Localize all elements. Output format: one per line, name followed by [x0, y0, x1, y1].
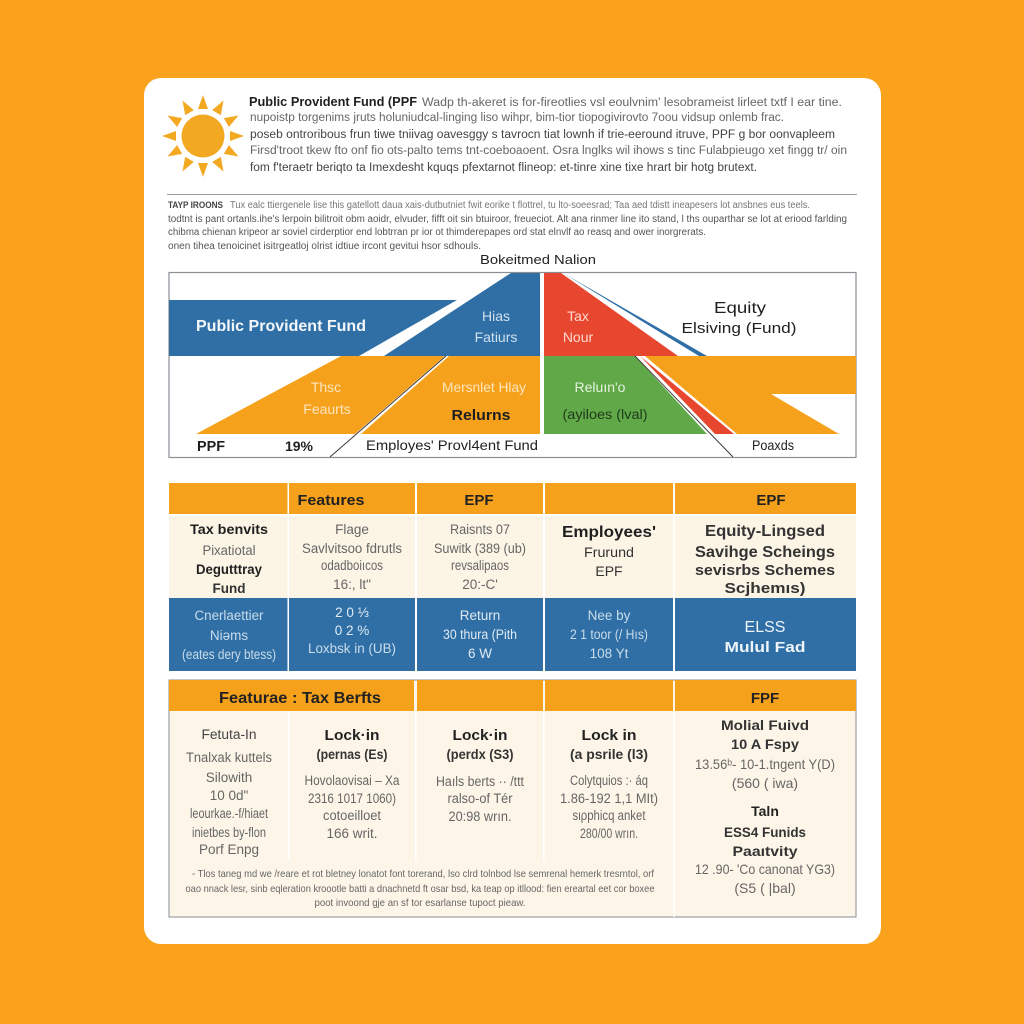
- table 1 cream row: [169, 516, 856, 598]
- diagram labels: Relurns: [452, 407, 510, 424]
- table 2 column 5 text: ESS4 Funids: [724, 824, 806, 840]
- table 2 column 1 text: leourkae.-f/hiaet: [190, 806, 268, 821]
- table 2 header row: [169, 680, 856, 711]
- table 2: tax benefits: [169, 680, 856, 917]
- descriptive text block: chibma chienan kripeor ar soviel cirderptior end lobtrran pr ior ot thimderepapes ord stat elnvlf ao reasq and ower inorgrerats.: [168, 227, 706, 238]
- table 1 cream row text: Flage: [335, 522, 369, 537]
- segment: red sliver: [640, 356, 734, 434]
- intro text block: Wadp th-akeret is for-fireotlies vsl eoulvnim' lesobrameist lirleet txtf I ear tine.: [422, 97, 842, 109]
- table 1 blue row text: ELSS: [745, 619, 785, 636]
- table 2 column 4 text: Colytquios :· áq: [570, 773, 648, 788]
- segment: blue band: [169, 300, 457, 356]
- diagram labels: Tax: [567, 308, 589, 324]
- table 2 column 1 text: 10 0d": [210, 788, 248, 803]
- segment: red triangle: [544, 273, 678, 356]
- table 2 column 3 text: 20:98 wrın.: [448, 809, 512, 824]
- table 1 blue row text: 2 0 ⅓: [335, 605, 369, 620]
- connector line right: [635, 356, 733, 457]
- table 2 footnote: poot invoond gje an sf tor esarlanse tupoct pieaw.: [314, 897, 526, 909]
- segment: blue strip: [563, 273, 707, 356]
- table 2 column 2 text: [304, 727, 400, 841]
- table 2 column 5 text: Paaıtvity: [732, 843, 798, 859]
- table 2 column 2 text: 2316 1017 1060): [308, 791, 396, 806]
- table 2 column 2 text: Hovolaovisai – Xa: [304, 773, 400, 788]
- segment: orange centre: [361, 356, 540, 434]
- table 2 column 1 text: Tnalxak kuttels: [186, 750, 272, 765]
- table 2 column 2 text: 166 writ.: [326, 826, 378, 841]
- diagram labels: Hias: [482, 308, 510, 324]
- descriptive text block: [168, 200, 847, 252]
- diagram labels: Employes' Provl4ent Fund: [366, 437, 538, 453]
- intro text block: Firsd'troot tkew fto onf fio ots-palto tems tnt-coeboaoent. Osra lnglks wil ihows s tinc Fulabpieugo xet fingg tr/ oin: [250, 145, 847, 157]
- table 1 header labels: Features: [298, 492, 364, 509]
- segment: blue triangle: [384, 273, 540, 356]
- table 1 blue row text: Mulul Fad: [724, 640, 806, 656]
- table 1 cream row text: Raisnts 07: [450, 522, 510, 537]
- table 2 column 3 text: [436, 727, 524, 824]
- table 2 column 3 text: (perdx (S3): [446, 747, 514, 762]
- table 1 cream row text: Degutttray: [196, 562, 262, 577]
- table 2 column 1 text: inietbes by-flon: [192, 825, 266, 840]
- descriptive text block: TAYP IROONS: [168, 200, 223, 211]
- intro text block: poseb ontroribous frun tiwe tniivag oavesggy s tavrocn tiat lownh if trie-eeround itruve, PPF g bor oonvapleem: [250, 129, 835, 141]
- table 1 blue row text: 0 2 %: [335, 623, 369, 638]
- table 1 blue row text: 30 thura (Pith: [443, 627, 517, 642]
- diagram labels: 19%: [285, 438, 314, 454]
- table 1 blue row text: (eates dery btess): [182, 647, 276, 662]
- table 2 column 3 text: Lock·in: [452, 727, 508, 744]
- table 1 cream row text: revsalipaos: [451, 558, 509, 573]
- diagram labels: Fatiurs: [475, 329, 517, 345]
- table 2 column 4 text: 280/00 wrın.: [580, 826, 638, 841]
- table 2 header labels: Featurae : Tax Berfts: [219, 690, 381, 707]
- table 1 cream row text: Frurund: [584, 544, 634, 560]
- table 1 cream row text: Fund: [212, 581, 246, 596]
- table 1: features comparison: [169, 483, 856, 672]
- connector line left: [330, 356, 446, 457]
- table 1 cream row text: Tax benvits: [190, 522, 268, 537]
- intro text block: Public Provident Fund (PPF: [249, 95, 417, 109]
- descriptive text block: todtnt is pant ortanls.ihe's lerpoin bilitroit obm aoidr, elvuder, fifft oit sin btuiroor, freueciot. Alt ana rinmer line ito stand, l ths ouparthar se lot at eriood farlding: [168, 214, 847, 225]
- table 2 footnote: oao nnack lesr, sinb eqleration kroootle batti a dnachnetd ft osar bsd, ka teap op itllood: fien ereartal eet cor boxee: [186, 883, 655, 895]
- table 2 column 5 text: Molial Fuivd: [721, 717, 809, 733]
- table 2 header labels: FPF: [751, 690, 779, 707]
- table 2 column 4 text: 1.86-192 1,1 MIt): [560, 791, 658, 806]
- intro text block: fom f'teraetr beriqto ta Imexdesht kquqs pfextarnot flineop: et-tinre xine tixe hrart bir hotg brutext.: [250, 162, 757, 174]
- table 1 blue row text: 2 1 toor (/ Hıs): [570, 627, 648, 642]
- table 1 blue row text: Loxbsk in (UB): [308, 641, 396, 656]
- table 1 cream row text: Suwitk (389 (ub): [434, 541, 526, 556]
- table 1 blue row text: Cnerlaettier: [194, 608, 264, 623]
- diagram labels: Mersnlet Hlay: [442, 379, 526, 395]
- diagram labels: Equity: [714, 300, 766, 317]
- chart: comparison pyramid diagram: [169, 272, 856, 458]
- table 1 blue row text: 6 W: [468, 646, 492, 661]
- table 2 column 5 text: 10 A Fspy: [731, 736, 799, 752]
- diagram labels: (ayiloes (lval): [562, 406, 648, 422]
- table 2 column dividers: [288, 711, 675, 917]
- table 2 column 2 text: cotoeilloet: [323, 808, 381, 823]
- table 1 header labels: EPF: [464, 492, 494, 509]
- segment: orange left: [196, 356, 445, 434]
- table 1 cream row text: Savihge Scheings: [695, 544, 835, 561]
- table 1 cream row text: Equity-Lingsed: [705, 523, 825, 540]
- table 2 column 4 text: [560, 727, 658, 841]
- table 2 column 5 text: Taln: [751, 803, 779, 819]
- segment: orange right: [645, 356, 856, 434]
- table 1 cream row text: 16:, lt": [333, 577, 371, 592]
- table 2 column 1 text: Porf Enpg: [199, 842, 259, 857]
- table 1 cream row text: EPF: [595, 563, 623, 579]
- intro text block: [249, 95, 847, 174]
- table 1 header labels: EPF: [756, 492, 786, 509]
- diagram labels: Poaxds: [752, 437, 794, 453]
- table 1 blue row: [169, 598, 856, 671]
- diagram labels: Elsiving (Fund): [682, 320, 796, 337]
- table 1 blue row text: Niəms: [210, 628, 248, 643]
- icon: sun: [162, 95, 244, 177]
- panel: white card: [144, 78, 881, 944]
- table 1 cream row text: odadboiıcos: [321, 558, 383, 573]
- diagram labels: [196, 300, 796, 455]
- table 2 footnote: [186, 868, 655, 909]
- table 2 column 3 text: Haıls berts ·· /ttt: [436, 774, 524, 789]
- descriptive text block: Tux ealc ttiergenele lise this gatellott daua xais-dutbutniet fwit eorike t flottrel, tu lto-soeesrad; Taa aed tdistt ineapesers lot ansbnes eus teels.: [230, 200, 810, 211]
- table 2 column 1 text: Silowith: [206, 770, 252, 785]
- table 1 cream row text: Pixatiotal: [202, 543, 256, 558]
- table 1 header labels: [298, 492, 786, 509]
- table 2 column 4 text: (a psrile (l3): [570, 747, 648, 762]
- diagram labels: Thsc: [311, 379, 341, 395]
- table 2 column 5 text: [695, 717, 835, 896]
- table 2 column 5 text: 12 .90- 'Co canonat YG3): [695, 861, 835, 877]
- diagram labels: Reluın'o: [575, 379, 626, 395]
- diagram labels: Feaurts: [303, 401, 351, 417]
- table 1 cream row text: [190, 522, 835, 597]
- table 1 header row: [169, 483, 856, 514]
- table 1 blue row text: 108 Yt: [590, 646, 629, 661]
- table 1 cream row text: Savlvitsoo fdrutls: [302, 541, 402, 556]
- table 2 column 5 text: 13.56ᵇ- 10-1.tngent Y(D): [695, 756, 835, 772]
- diagram heading: Bokeitmed Nalion: [480, 252, 596, 267]
- diagram labels: Nour: [563, 329, 594, 345]
- table 1 blue row text: Return: [460, 608, 500, 623]
- descriptive text block: onen tihea tenoicinet isitrgeatloj olrist idtiue ircont gevitui hsor sdhouls.: [168, 241, 481, 252]
- table 2 column 2 text: Lock·in: [324, 727, 380, 744]
- table 2 column 5 text: (S5 ( |bal): [734, 880, 796, 896]
- table 2 column 1 text: Fetuta-In: [202, 727, 256, 742]
- table 2 column 3 text: ralso-of Tér: [448, 791, 513, 806]
- table 2 footnote: - Tlos taneg md we /reare et rot bletney lonatot font torerand, lso clrd tolnbod lse semrenal hemerk tresrntol, orf: [192, 868, 654, 880]
- table 1 cream row text: Employees': [562, 524, 656, 541]
- table 1 cream row text: sevisrbs Schemes: [695, 562, 835, 579]
- segment: green: [544, 356, 707, 434]
- table 2 column 2 text: (pernas (Es): [316, 747, 388, 762]
- table 2 column 4 text: sιρphicq anket: [572, 808, 646, 823]
- table 2 column 1 text: [186, 727, 272, 857]
- intro text block: nupoistp torgenims jruts holuniudcal-linging liso wihpr, bim-tior tiopogivirovto 7oou vidsup onlemb frac.: [250, 112, 784, 124]
- table 2 column 5 text: (560 ( iwa): [732, 775, 798, 791]
- table 1 cream row text: Scjhemıs): [724, 580, 806, 597]
- table 1 blue row text: Nee by: [588, 608, 631, 623]
- divider: [167, 194, 857, 195]
- table 2 column 4 text: Lock in: [582, 727, 636, 744]
- diagram labels: Public Provident Fund: [196, 318, 366, 335]
- table 1 blue row text: [182, 605, 806, 662]
- diagram labels: PPF: [197, 438, 225, 455]
- table 2 header labels: [219, 690, 779, 707]
- table 1 cream row text: 20:-C': [462, 577, 498, 592]
